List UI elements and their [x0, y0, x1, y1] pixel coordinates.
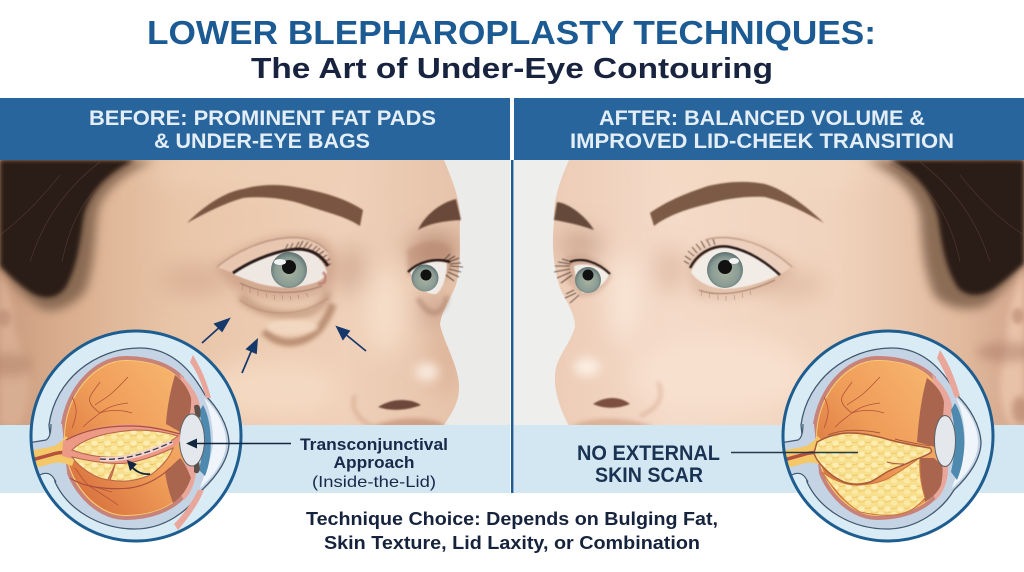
face skin: after	[553, 160, 1024, 428]
ear	[0, 272, 32, 426]
pink lid strip	[174, 355, 211, 530]
label: no external skin scar: NO EXTERNAL	[577, 442, 720, 465]
fat pad upper	[72, 430, 178, 457]
label: no external skin scar	[577, 442, 720, 487]
header: before	[0, 98, 510, 160]
header: after: AFTER: BALANCED VOLUME &	[599, 107, 925, 130]
cornea chamber	[200, 398, 226, 488]
blue cornea and lens	[951, 403, 964, 480]
band: after	[514, 425, 1024, 493]
fat pad lower	[822, 457, 925, 515]
label: transconjunctival approach: (Inside-the-Lid)	[312, 474, 436, 491]
pink lid strip	[937, 350, 960, 398]
fat pad lower	[72, 448, 173, 481]
hair	[0, 160, 155, 310]
band: before	[0, 425, 510, 493]
fat capsule	[62, 424, 180, 464]
label: transconjunctival approach	[300, 436, 448, 491]
brow far	[418, 199, 461, 230]
globe	[814, 358, 944, 518]
ciliary band lower	[165, 458, 191, 503]
title: LOWER BLEPHAROPLASTY TECHNIQUES:	[147, 14, 876, 51]
optic nerve	[32, 424, 68, 480]
ciliary band upper	[166, 375, 191, 432]
nose	[354, 363, 444, 428]
sclera outer wall	[801, 348, 981, 529]
retinal vessels	[72, 377, 132, 505]
arrow one	[202, 319, 229, 343]
subtitle: The Art of Under-Eye Contouring	[251, 53, 773, 85]
pink ciliary wedge	[178, 374, 200, 500]
label: no external skin scar: SKIN SCAR	[595, 464, 703, 487]
arrow two	[242, 340, 257, 373]
brow main	[187, 185, 363, 226]
face skin: before	[0, 160, 460, 428]
diagram: after eye cross-section	[780, 331, 993, 541]
cornea chamber	[952, 398, 978, 488]
brow main	[650, 182, 824, 226]
header: after	[514, 98, 1024, 160]
label: transconjunctival approach: Transconjunctival	[300, 436, 448, 454]
header: before: & UNDER-EYE BAGS	[154, 130, 370, 153]
fat pad upper	[814, 433, 932, 484]
diagram: before eye cross-section	[28, 331, 241, 541]
caption: technique choice: Skin Texture, Lid Laxity, or Combination	[324, 533, 700, 553]
header: after: IMPROVED LID-CHEEK TRANSITION	[570, 130, 954, 153]
ciliary band lower	[920, 458, 943, 502]
nose	[572, 358, 661, 428]
panel: after photo	[514, 150, 1024, 428]
ear	[977, 266, 1024, 426]
globe	[62, 358, 192, 518]
blue cornea and lens	[199, 405, 211, 476]
center divider	[511, 160, 514, 493]
sclera outer wall	[49, 348, 229, 529]
incision line	[100, 442, 172, 459]
brow far	[554, 202, 594, 230]
small curved arrow	[132, 467, 150, 475]
eye far	[407, 242, 463, 313]
arrows: before, fat pads	[202, 319, 366, 373]
arrow three	[337, 327, 366, 351]
label: transconjunctival approach: Approach	[334, 454, 414, 472]
optic nerve	[780, 424, 820, 482]
panel: before photo	[0, 150, 510, 428]
under-eye bags	[240, 292, 333, 342]
eye far	[554, 254, 612, 303]
retinal vessels	[824, 377, 884, 428]
pink ciliary wedge	[930, 374, 952, 500]
leader: transconjunctival	[186, 438, 291, 448]
hair	[865, 160, 1024, 309]
caption: technique choice	[306, 509, 718, 553]
header: before: BEFORE: PROMINENT FAT PADS	[89, 107, 436, 130]
eye main	[684, 238, 795, 301]
ciliary band upper	[917, 378, 944, 447]
leader: no external scar	[731, 452, 858, 454]
caption: technique choice: Technique Choice: Depends on Bulging Fat,	[306, 509, 718, 529]
eye main	[215, 235, 335, 300]
